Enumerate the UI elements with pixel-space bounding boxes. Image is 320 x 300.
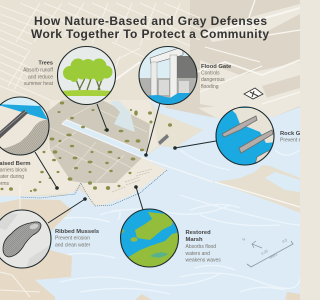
peninsula — [154, 114, 203, 147]
label: restored marsh: Restored — [186, 230, 211, 236]
scale and north arrow — [242, 237, 293, 267]
panel: rock groins — [215, 106, 276, 166]
community land — [0, 100, 167, 206]
creek — [110, 100, 135, 132]
island — [215, 165, 300, 213]
island lagoon — [265, 172, 300, 192]
vegetation — [0, 102, 172, 192]
label: trees: summer heat — [24, 81, 54, 87]
lower west land — [0, 199, 72, 300]
upper right land — [165, 0, 300, 118]
label: trees: Trees — [38, 60, 53, 66]
dotted shoreline — [20, 170, 167, 206]
panel: trees — [57, 46, 117, 106]
light land patches — [198, 4, 300, 118]
label: flood gate: Flood Gate — [201, 64, 232, 70]
scale and north arrow: N — [242, 237, 246, 242]
island road — [215, 182, 300, 207]
label: restored marsh: waters and — [186, 251, 210, 257]
panel: raised berm — [0, 96, 50, 156]
label: ribbed mussels: and clean water — [55, 242, 91, 248]
community block — [47, 99, 150, 183]
label: ribbed mussels: Ribbed Mussels — [55, 229, 99, 235]
label: trees: and reduce — [28, 74, 53, 80]
label: restored marsh — [186, 230, 221, 264]
panel: flood gate — [139, 46, 199, 106]
street grid — [0, 3, 200, 100]
label: flood gate: flooding — [201, 84, 219, 90]
label: trees — [23, 60, 54, 87]
scale and north arrow: 0.5 — [282, 238, 288, 244]
panel: ribbed mussels — [0, 209, 52, 270]
title — [31, 14, 269, 41]
corner lands — [135, 292, 300, 300]
canal — [62, 120, 147, 158]
water — [0, 96, 300, 300]
leader lines — [35, 103, 216, 223]
dock — [158, 134, 169, 145]
scale and north arrow: 0.25 — [261, 249, 269, 256]
waves — [55, 150, 300, 294]
beach texture — [112, 169, 152, 192]
label: ribbed mussels: Prevent erosion — [55, 236, 90, 242]
label: flood gate: Controls — [201, 70, 220, 76]
white roads upper right — [115, 0, 300, 104]
label: raised berm — [0, 161, 30, 187]
label: ribbed mussels — [55, 229, 99, 248]
west roads — [0, 185, 40, 297]
label: restored marsh: weakens waves — [186, 258, 221, 264]
label: rock groins — [280, 131, 315, 144]
label: flood gate: dangerous — [201, 77, 225, 83]
label: restored marsh: Marsh — [186, 237, 203, 243]
icon: mussel — [3, 222, 41, 257]
panel: restored marsh — [120, 208, 180, 270]
scale and north arrow: Miles — [269, 252, 278, 260]
title: Work Together To Protect a Community — [31, 27, 269, 41]
label: trees: Absorb runoff — [23, 68, 54, 74]
icon: airport — [244, 88, 263, 99]
road — [143, 158, 213, 182]
label: flood gate — [201, 64, 232, 90]
title: How Nature-Based and Gray Defenses — [34, 14, 267, 28]
community streets — [50, 102, 147, 182]
label: restored marsh: Absorbs flood — [186, 244, 216, 250]
